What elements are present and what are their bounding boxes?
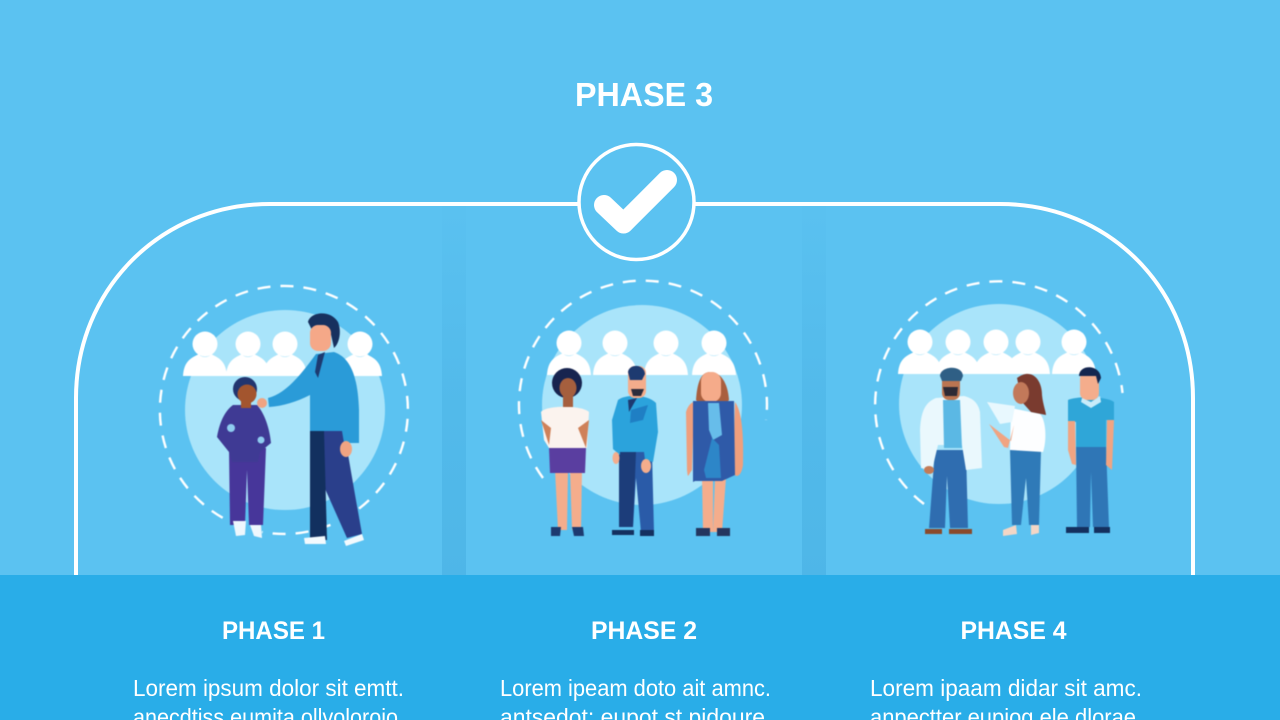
figure: woman reading	[987, 374, 1046, 536]
text block: phase 1	[133, 675, 404, 720]
illustration: phase 4	[875, 281, 1122, 536]
text block: phase 1: Lorem ipsum dolor sit emtt.	[133, 675, 404, 701]
bottom band	[0, 575, 1280, 720]
figure: woman in vest	[686, 372, 743, 536]
figure: man in teal shirt	[1066, 367, 1114, 533]
text block: phase 2	[500, 675, 771, 720]
text block: phase 4	[870, 675, 1142, 720]
heading: phase 1: PHASE 1	[222, 617, 325, 645]
figure: child	[217, 377, 271, 538]
icon: check mark badge	[579, 144, 694, 260]
heading: phase 4: PHASE 4	[960, 617, 1067, 645]
figure: adult	[257, 313, 364, 546]
illustration: phase 1	[160, 286, 408, 546]
figure: man in lab coat	[920, 368, 982, 534]
text block: phase 2: Lorem ipeam doto ait amnc.	[500, 675, 771, 701]
figure: man in blue shirt	[612, 366, 658, 536]
title: phase 3: PHASE 3	[575, 76, 713, 113]
column: phase 2	[500, 617, 771, 720]
text block: phase 4: Lorem ipaam didar sit amc.	[870, 675, 1142, 701]
panel divider: left	[442, 205, 466, 575]
arch connector	[76, 204, 1193, 575]
illustration: phase 2	[519, 281, 767, 536]
panel divider: right	[802, 205, 826, 575]
column: phase 1	[133, 617, 404, 720]
column: phase 4	[870, 617, 1142, 720]
heading: phase 2: PHASE 2	[591, 617, 697, 645]
figure: woman in white top	[541, 368, 589, 536]
